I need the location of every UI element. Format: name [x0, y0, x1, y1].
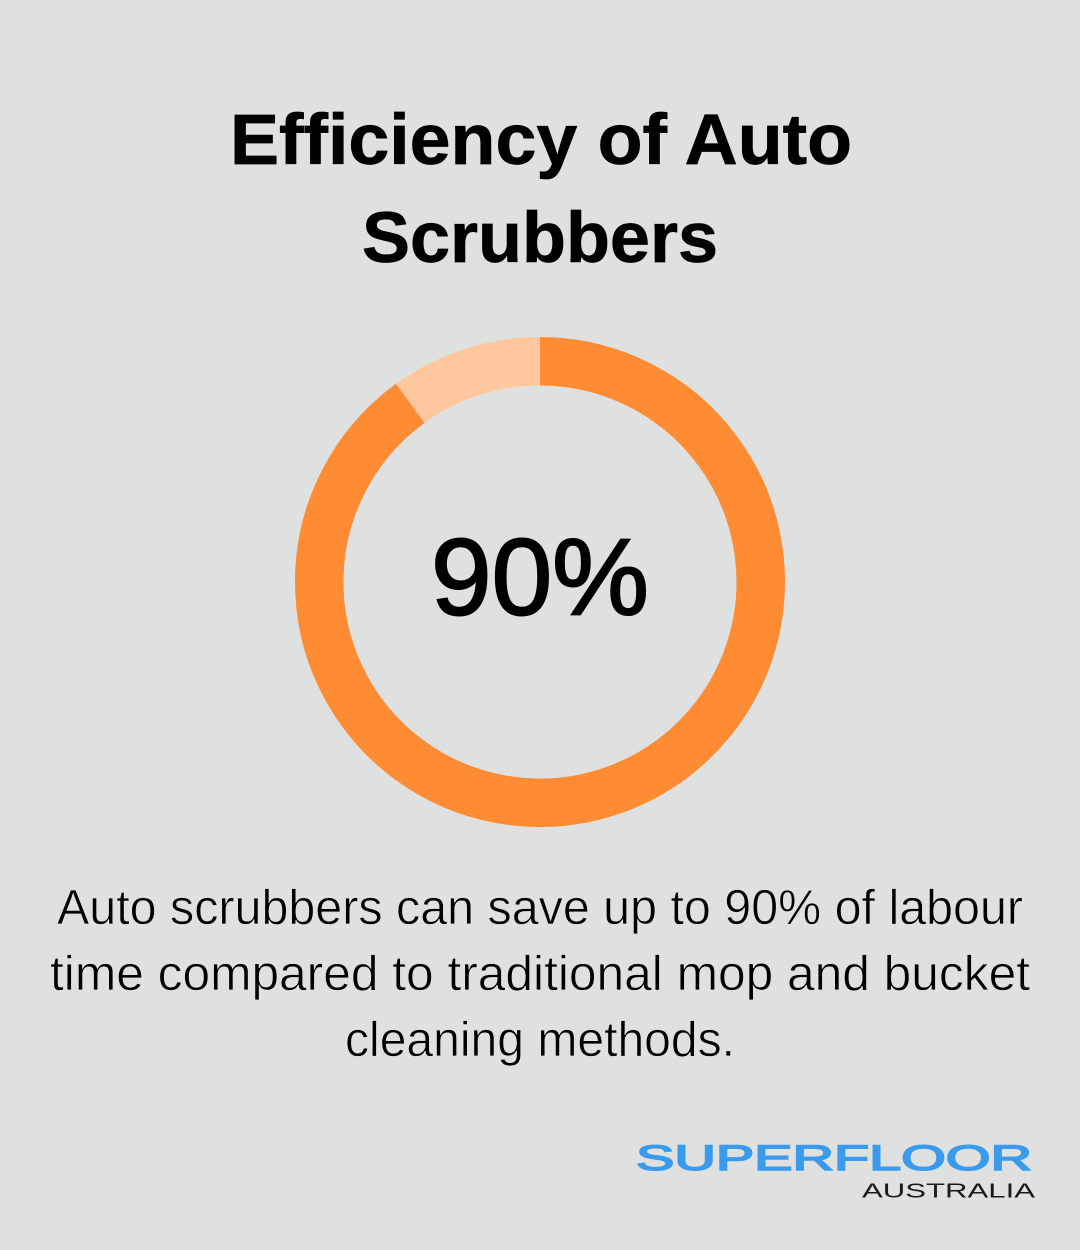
description: time compared to traditional mop and bucket — [50, 947, 1030, 1001]
title — [230, 101, 852, 278]
description — [50, 881, 1030, 1067]
donut chart: 90% — [319, 361, 761, 803]
central value: 90% — [431, 516, 649, 638]
description: cleaning methods. — [345, 1013, 735, 1067]
logo: Superfloor Australia — [636, 1138, 1035, 1202]
title: Efficiency of Auto — [230, 101, 852, 180]
logo: Superfloor Australia: AUSTRALIA — [862, 1180, 1035, 1202]
description: Auto scrubbers can save up to 90% of labour — [57, 881, 1023, 935]
logo: Superfloor Australia: SUPERFLOOR — [636, 1138, 1032, 1178]
title: Scrubbers — [362, 199, 718, 278]
